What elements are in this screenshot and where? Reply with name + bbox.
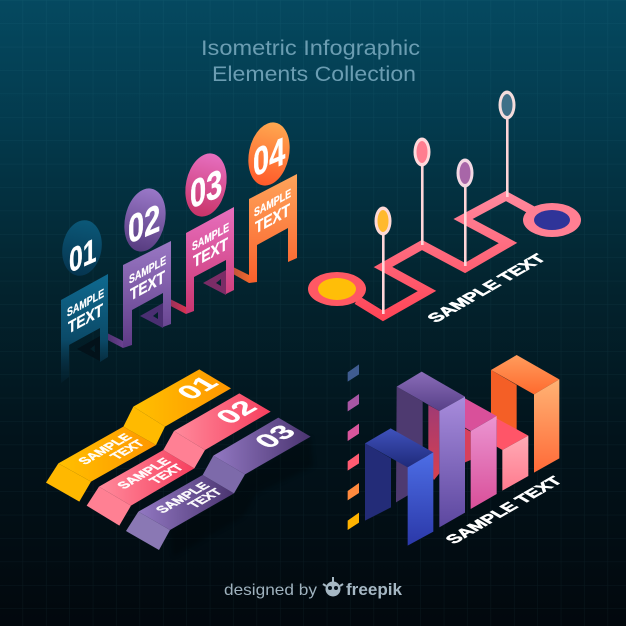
flag 03 (186, 207, 234, 314)
icon: freepik mascot (323, 577, 343, 596)
ribbon 03: TEXT (184, 486, 226, 510)
ribbon 02: TEXT (146, 462, 187, 486)
panel: numbered isometric flags (58, 119, 297, 383)
number 02: 02 (128, 195, 160, 253)
flag text 04 (254, 185, 291, 238)
red arch top (497, 418, 528, 450)
route line (357, 196, 537, 316)
number 01: 01 (69, 231, 96, 281)
magenta arch top (465, 398, 497, 431)
route label: SAMPLE TEXT (423, 251, 551, 325)
circle 01 (58, 217, 106, 279)
start node (308, 272, 366, 306)
ribbon 01: TEXT (107, 438, 148, 461)
ribbon 03: SAMPLE (152, 480, 213, 515)
ribbon 02 (87, 393, 271, 526)
title: Elements Collection (212, 63, 416, 86)
pin: yellow (374, 206, 392, 314)
flag text 01: TEXT (68, 299, 103, 338)
bar chart label: SAMPLE TEXT (441, 474, 567, 546)
number 03: 03 (190, 160, 222, 218)
flag text 01: SAMPLE (67, 285, 104, 320)
ribbon 03 (126, 418, 311, 550)
circle 02 (119, 185, 171, 255)
legend squares (348, 364, 359, 530)
red wall (428, 405, 439, 480)
orange arch (491, 355, 559, 473)
title (201, 37, 420, 86)
flag text 02 (129, 252, 166, 305)
flag 02 (123, 241, 171, 348)
ribbon 01 (46, 369, 231, 502)
flag text 03: TEXT (193, 233, 228, 272)
ribbon 03: 03 (248, 421, 302, 452)
ribbon shadow (170, 437, 313, 557)
circle 04 (243, 119, 295, 189)
flag text 02: TEXT (130, 266, 165, 305)
flag text 04: SAMPLE (254, 185, 291, 220)
flag text 03: SAMPLE (192, 219, 229, 254)
pink bar (502, 436, 528, 491)
pin: purple (456, 158, 474, 266)
title: Isometric Infographic (201, 37, 420, 60)
purple arch top (397, 372, 465, 411)
ribbon 01: SAMPLE (75, 431, 135, 466)
panel: route map with pins (308, 90, 581, 325)
number 04: 04 (253, 128, 285, 186)
purple arch back face (396, 387, 423, 502)
purple bar (439, 397, 465, 527)
end node (523, 203, 581, 237)
circle 03 (180, 150, 232, 220)
magenta bar (471, 416, 497, 509)
flag 01 (61, 274, 108, 383)
flag 04 (249, 174, 297, 283)
panel: isometric bar chart (348, 355, 567, 546)
pin: teal (498, 90, 516, 197)
ribbon 02: 02 (209, 396, 264, 428)
footer credit: freepik (346, 580, 403, 599)
ribbon 02: SAMPLE (114, 456, 174, 491)
ribbon 01: 01 (170, 372, 225, 404)
connector bands and floor triangles (77, 267, 249, 361)
footer credit: designed by (224, 582, 317, 599)
flag text 01 (67, 285, 104, 338)
flag text 03 (192, 219, 229, 272)
flag text 04: TEXT (255, 199, 290, 238)
blue arch (365, 428, 433, 546)
pin: pink (414, 138, 430, 245)
flag text 02: SAMPLE (129, 252, 166, 287)
panel: folded ribbons (46, 369, 313, 557)
footer credit (224, 577, 403, 599)
